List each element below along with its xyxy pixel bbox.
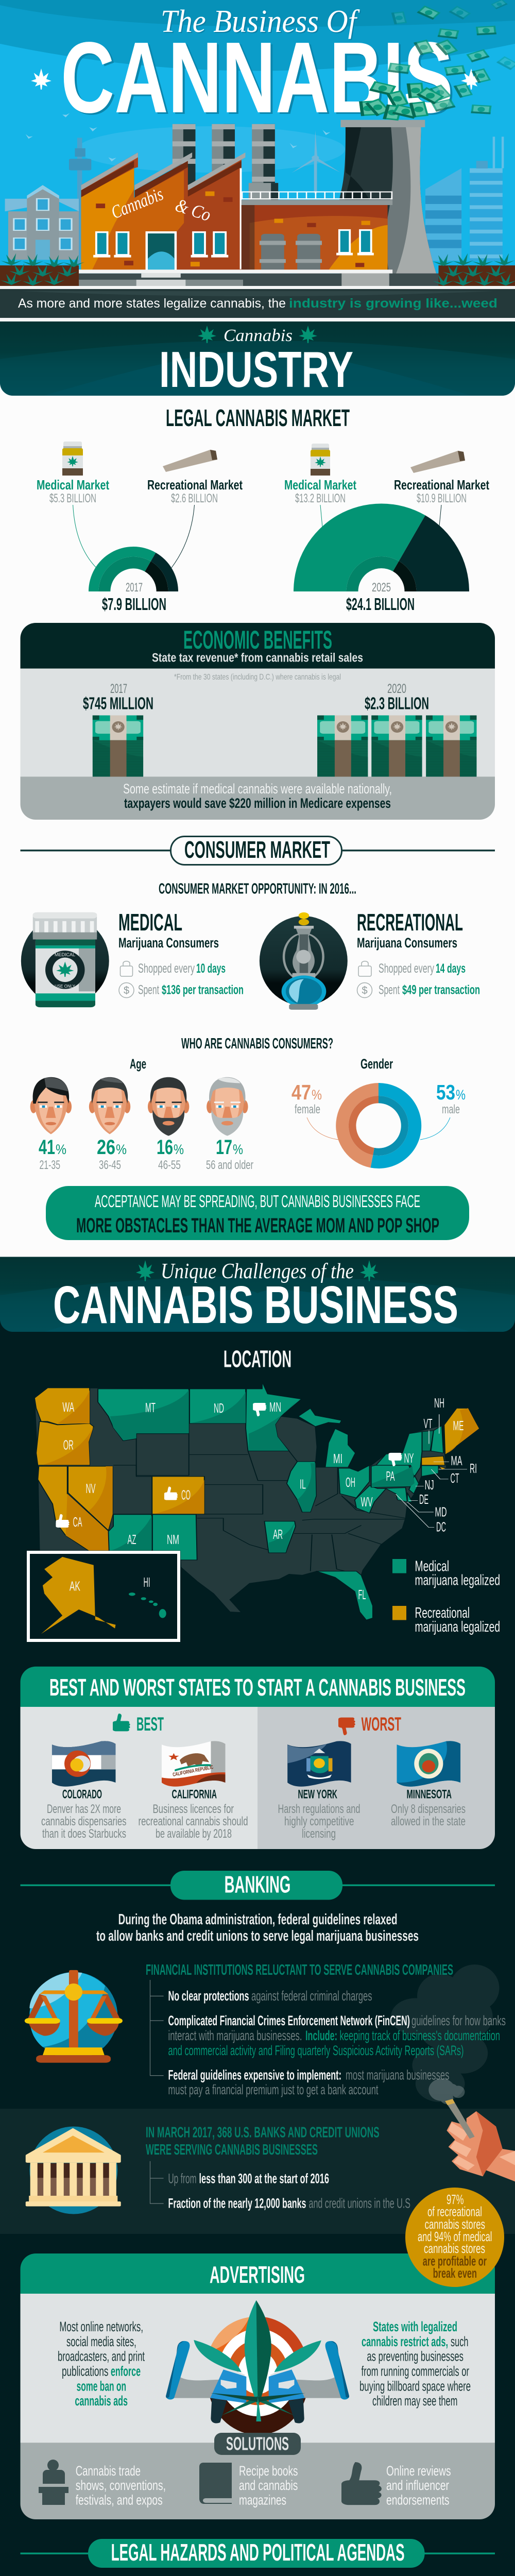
stats: age percentages: 56 and older	[206, 1158, 253, 1172]
block: march 2017 banks: Up from	[168, 2171, 197, 2186]
panel: advertising	[21, 2253, 495, 2519]
heading pill: consumer market	[21, 836, 495, 865]
footnote: *From the 30 states (including D.C.) where cannabis is legal	[174, 673, 341, 682]
text: trade shows	[76, 2463, 166, 2507]
map inset: Alaska and Hawaii: HI	[143, 1574, 150, 1590]
state labels: RI	[470, 1461, 477, 1476]
medicare savings text: Some estimate if medical cannabis were available nationally,	[123, 781, 392, 796]
text: medical consumers: MEDICAL	[118, 909, 182, 936]
market labels: $10.9 BILLION	[417, 492, 467, 505]
label: worst	[338, 1714, 401, 1735]
medical states	[98, 1382, 443, 1620]
state labels: IL	[300, 1477, 306, 1492]
heading: age: Age	[130, 1056, 146, 1072]
heading: legal cannabis market: LEGAL CANNABIS MARKET	[166, 404, 350, 431]
state labels: AR	[273, 1527, 283, 1542]
section header: Cannabis Industry	[0, 321, 515, 398]
section header: unique challenges: Unique Challenges of the	[161, 1260, 354, 1283]
text: recreational consumers: Marijuana Consumers	[357, 935, 457, 951]
state: california: Business licences for	[152, 1802, 234, 1816]
text: medical consumers: Shopped every	[138, 961, 195, 976]
band: lighter banking row	[0, 2109, 515, 2234]
chart: gender donut: female	[295, 1103, 320, 1116]
text: medical consumers: Marijuana Consumers	[118, 935, 219, 951]
market labels: $13.2 BILLION	[295, 492, 346, 505]
face 56 and older	[207, 1077, 248, 1136]
flags	[52, 1741, 460, 1789]
state: new york	[278, 1788, 360, 1841]
text: state restrictions	[359, 2319, 471, 2409]
map: united states legalization	[35, 1382, 479, 1620]
stats: age percentages: %	[116, 1142, 127, 1157]
stats: age percentages: %	[174, 1142, 184, 1157]
tanks	[260, 234, 322, 281]
chart: gender donut: %	[456, 1087, 466, 1103]
state labels: NH	[434, 1395, 444, 1411]
states without legalization	[35, 1382, 447, 1613]
market labels: $5.3 BILLION	[49, 492, 96, 505]
state labels	[62, 1395, 477, 1602]
block: financial institutions reluctant: Federal guidelines expensive to implement:	[168, 2067, 341, 2083]
wind turbine	[291, 130, 340, 194]
illustration: target, megaphones, leaf	[166, 2300, 349, 2435]
flag: california	[162, 1741, 226, 1789]
callout: profitability: of recreational	[427, 2204, 482, 2219]
state: california: recreational cannabis should	[138, 1815, 248, 1828]
icon: book	[199, 2463, 232, 2504]
california flag wording: CALIFORNIA REPUBLIC	[172, 1765, 214, 1778]
text: recipe books: magazines	[239, 2492, 286, 2507]
money bills flying from chimney	[359, 0, 515, 121]
section header: unique challenges	[0, 1257, 515, 1334]
chart: gender donut: %	[312, 1087, 322, 1103]
state labels: MA	[451, 1453, 462, 1468]
chart: 2025 market half donut: 2025	[372, 581, 391, 595]
block: march 2017 banks: WERE SERVING CANNABIS BUSINESSES	[146, 2142, 318, 2158]
medicare savings text: taxpayers would save $220 million in Medicare expenses	[124, 795, 391, 811]
subheading: tax revenue: State tax revenue* from cannabis retail sales	[152, 651, 363, 665]
state: colorado	[41, 1788, 127, 1841]
chart: gender donut: male	[442, 1103, 460, 1116]
market labels: Medical Market	[37, 477, 109, 493]
flag: colorado	[52, 1741, 116, 1789]
block: financial institutions reluctant: against federal criminal charges	[251, 1988, 372, 2004]
recreational states	[35, 1388, 479, 1551]
house	[5, 185, 79, 260]
state: colorado: COLORADO	[62, 1788, 102, 1801]
icon: money stacks	[93, 716, 476, 777]
state labels: NV	[85, 1481, 96, 1496]
block: march 2017 banks	[146, 2125, 410, 2211]
state labels: ME	[453, 1418, 464, 1433]
illustration: smoke and hand with joint	[391, 1964, 515, 2181]
text: online reviews: Online reviews	[386, 2463, 451, 2479]
text: advertising ban: some ban on	[77, 2378, 126, 2394]
title: The Business Of: The Business Of	[161, 4, 360, 39]
stat: 2020 tax revenue: $2.3 BILLION	[365, 694, 429, 713]
text: advertising ban: broadcasters, and print	[58, 2349, 145, 2364]
text: medical consumers: $136 per transaction	[162, 983, 244, 997]
birds	[26, 113, 331, 161]
stats: age percentages: %	[233, 1142, 243, 1157]
label: best: BEST	[136, 1714, 164, 1735]
heading: location: LOCATION	[224, 1346, 291, 1372]
icon: title leaves	[31, 69, 482, 90]
block: march 2017 banks: Fraction of the nearly 12,000 banks	[168, 2196, 306, 2211]
state labels: CT	[450, 1470, 459, 1486]
text: banking intro	[96, 1911, 419, 1944]
callout: profitability: 97%	[447, 2192, 464, 2207]
map inset: Alaska and Hawaii	[28, 1552, 179, 1640]
state labels: OR	[63, 1437, 74, 1453]
state labels: NJ	[425, 1477, 434, 1493]
text: recreational consumers: Shopped every	[379, 961, 434, 976]
block: financial institutions reluctant: No clear protections	[168, 1988, 249, 2004]
market labels: $2.6 BILLION	[171, 492, 218, 505]
state: new york: licensing	[302, 1827, 336, 1841]
dark section background	[0, 1257, 515, 2576]
block: march 2017 banks: less than 300 at the start of 2016	[199, 2171, 329, 2186]
state labels: DC	[436, 1519, 446, 1534]
state: new york: Harsh regulations and	[278, 1802, 360, 1816]
factory sign: Cannabis & Co: & Co	[173, 195, 213, 225]
section header: Cannabis Industry: INDUSTRY	[159, 341, 353, 398]
section header: Cannabis Industry: Cannabis	[224, 326, 293, 345]
panel: best and worst states	[21, 1667, 495, 1849]
stat: 2017 tax revenue: 2017	[110, 682, 127, 696]
chart: 2025 market half donut	[294, 503, 469, 614]
text: recreational consumers: 14 days	[436, 961, 466, 976]
stat: 2020 tax revenue: 2020	[387, 682, 406, 696]
state: minnesota: Only 8 dispensaries	[391, 1802, 466, 1816]
state labels: MI	[333, 1451, 342, 1466]
icon: medical jar	[21, 912, 109, 1007]
state labels: MD	[435, 1504, 447, 1520]
market labels: Medical Market	[284, 477, 356, 493]
text: state restrictions: cannabis restrict ads,	[362, 2334, 448, 2349]
hero background sky	[0, 0, 515, 330]
text: recipe books	[239, 2463, 298, 2507]
second factory building	[242, 200, 392, 270]
stat: 2017 tax revenue: $745 MILLION	[83, 694, 153, 713]
stats: age percentages: 21-35	[39, 1158, 60, 1172]
text: advertising ban: Most online networks,	[59, 2319, 143, 2334]
cooling tower	[337, 120, 440, 286]
state: california: be available by 2018	[156, 1827, 232, 1841]
icon: medical jar: MEDICAL	[55, 952, 75, 957]
heading pill: banking: BANKING	[225, 1871, 290, 1898]
railing	[242, 191, 392, 199]
text: state restrictions: such	[451, 2334, 469, 2349]
stats: age percentages: 36-45	[99, 1158, 121, 1172]
text: state restrictions: States with legalized	[373, 2319, 457, 2334]
text: trade shows: shows, conventions,	[76, 2478, 166, 2493]
chart: 2017 market half donut	[73, 505, 195, 614]
chart: 2025 market half donut: $24.1 BILLION	[346, 595, 415, 614]
state: colorado: Denver has 2X more	[47, 1802, 121, 1816]
stats: age percentages	[39, 1136, 253, 1172]
text: state restrictions: children may see them	[372, 2393, 457, 2409]
state: colorado: cannabis dispensaries	[41, 1815, 127, 1828]
thumbs	[56, 1403, 402, 1528]
heading: economic benefits: ECONOMIC BENEFITS	[183, 625, 332, 654]
stats: age percentages: 26	[97, 1136, 115, 1159]
state: new york: NEW YORK	[298, 1788, 337, 1801]
legend: Recreational	[415, 1605, 470, 1621]
block: financial institutions reluctant: interact with marijuana businesses.	[168, 2028, 302, 2043]
text: trade shows: Cannabis trade	[76, 2463, 141, 2479]
text: recreational consumers	[357, 909, 480, 997]
text: advertising ban: enforce	[111, 2364, 141, 2379]
callout: profitability	[405, 2188, 504, 2287]
state labels: NY	[404, 1450, 414, 1466]
stat: 2020 tax revenue	[365, 682, 429, 713]
subheading: who are cannabis consumers: WHO ARE CANNABIS CONSUMERS?	[181, 1036, 333, 1052]
text: online reviews	[386, 2463, 451, 2507]
market labels	[37, 477, 489, 505]
stats: age percentages: %	[56, 1142, 66, 1157]
state labels: WA	[62, 1399, 75, 1415]
legend: Medical	[415, 1558, 449, 1575]
state labels: NM	[167, 1532, 179, 1547]
chart: gender donut	[291, 1080, 466, 1168]
stats: age percentages: 17	[216, 1136, 232, 1159]
state labels: ND	[214, 1400, 224, 1416]
text: recipe books: Recipe books	[239, 2463, 298, 2479]
chart: 2017 market half donut: $7.9 BILLION	[102, 595, 166, 614]
state labels: OH	[346, 1475, 355, 1490]
state labels: WV	[360, 1494, 373, 1510]
text: advertising ban	[58, 2319, 145, 2409]
state: minnesota	[391, 1788, 466, 1828]
block: financial institutions reluctant	[146, 1962, 506, 2097]
stats: age percentages: 16	[157, 1136, 173, 1159]
icon: hookah	[260, 912, 348, 1010]
heading pill: banking	[21, 1871, 495, 1900]
stat: 2017 tax revenue	[83, 682, 153, 713]
pill: solutions	[214, 2433, 301, 2455]
text: recreational consumers: $	[362, 985, 368, 996]
pill: solutions: SOLUTIONS	[226, 2433, 289, 2454]
state: new york: highly competitive	[284, 1815, 354, 1828]
text: medical consumers: Spent	[138, 983, 159, 997]
medicare savings text	[123, 781, 392, 811]
illustration: cannabis factory skyline	[0, 0, 515, 286]
text: online reviews: and influencer	[386, 2478, 449, 2493]
block: financial institutions reluctant: most marijuana businesses	[346, 2067, 449, 2083]
face 36-45	[89, 1077, 130, 1134]
chart: 2017 market half donut: 2017	[126, 581, 143, 595]
state: colorado: than it does Starbucks	[42, 1827, 126, 1841]
text: online reviews: endorsements	[386, 2492, 449, 2507]
block: financial institutions reluctant: must pay a financial premium just to get a bank account	[168, 2082, 379, 2097]
flag: new york	[287, 1741, 351, 1789]
callout: profitability: cannabis stores	[424, 2241, 485, 2256]
heading: advertising: ADVERTISING	[210, 2261, 305, 2288]
smoke	[391, 1964, 499, 2102]
icon: thumbs up	[341, 2462, 382, 2505]
state labels: VT	[423, 1416, 433, 1431]
state: california	[138, 1788, 248, 1841]
callout: profitability: break even	[433, 2265, 477, 2281]
stats: age percentages: 41	[39, 1136, 55, 1159]
text: medical consumers	[118, 909, 244, 997]
text: advertising ban: publications	[62, 2364, 108, 2379]
main factory building	[81, 152, 245, 275]
state: minnesota: allowed in the state	[391, 1815, 466, 1828]
factory sign: Cannabis & Co: Cannabis	[108, 183, 166, 223]
icons: four male faces by age	[30, 1077, 248, 1136]
smokestacks	[173, 124, 278, 202]
recreational state shading	[43, 1390, 479, 1550]
medical state shading	[110, 1390, 415, 1552]
text: recreational consumers: Spent	[379, 983, 400, 997]
chart: gender donut: 53	[436, 1080, 455, 1104]
state: minnesota: MINNESOTA	[407, 1788, 452, 1801]
label: best	[113, 1714, 164, 1735]
flag: minnesota	[397, 1741, 460, 1789]
heading: gender: Gender	[360, 1056, 393, 1072]
face 21-35	[30, 1077, 72, 1134]
tagline band: industry is growing like...weed	[289, 296, 497, 311]
legend	[392, 1558, 500, 1635]
hand	[447, 2111, 515, 2181]
page white background	[0, 396, 515, 1257]
heading pill: consumer market: CONSUMER MARKET	[184, 836, 330, 863]
panel: economic benefits	[21, 623, 495, 820]
state labels: FL	[358, 1587, 366, 1602]
state labels: DE	[419, 1492, 428, 1507]
state labels: MT	[145, 1400, 156, 1415]
text: advertising ban: social media sites,	[66, 2334, 136, 2349]
block: march 2017 banks: and credit unions in the U.S	[309, 2196, 410, 2211]
text: advertising ban: cannabis ads	[75, 2393, 128, 2409]
plants and soil	[0, 253, 515, 286]
subheading: consumer market opportunity: CONSUMER MARKET OPPORTUNITY: IN 2016...	[159, 881, 356, 897]
block: financial institutions reluctant: Include:	[305, 2028, 337, 2043]
foundation	[76, 269, 440, 286]
callout: obstacles	[46, 1186, 469, 1240]
text: recipe books: and cannabis	[239, 2478, 298, 2493]
face 46-55 bearded	[148, 1077, 189, 1136]
text: medical consumers: 10 days	[196, 961, 226, 976]
tagline band	[0, 286, 515, 321]
state: california: CALIFORNIA	[172, 1788, 217, 1801]
text: trade shows: festivals, and expos	[76, 2492, 163, 2507]
icon: bank	[26, 2126, 121, 2214]
icon: speaker at podium	[39, 2460, 68, 2505]
state labels: CO	[181, 1487, 191, 1502]
stats: age percentages: 46-55	[158, 1158, 181, 1172]
map inset: Alaska and Hawaii: AK	[70, 1579, 80, 1594]
text: medical consumers: $	[124, 985, 129, 996]
icon: scales of justice	[25, 1970, 123, 2063]
market labels: Recreational Market	[147, 477, 243, 493]
label: worst: WORST	[362, 1714, 401, 1735]
factory sign: Cannabis & Co	[108, 183, 213, 225]
tagline band: As more and more states legalize cannabis, the	[18, 296, 286, 311]
market icons: bottles and joints	[62, 442, 465, 476]
state labels: MN	[269, 1399, 281, 1415]
state labels: PA	[386, 1468, 395, 1484]
icon: medical jar: USE ONLY	[55, 984, 76, 989]
state labels: AZ	[128, 1532, 136, 1547]
callout leader lines	[396, 1414, 467, 1528]
chart: gender donut: 47	[291, 1080, 311, 1104]
state labels: CA	[73, 1514, 82, 1530]
background city buildings	[69, 137, 504, 264]
